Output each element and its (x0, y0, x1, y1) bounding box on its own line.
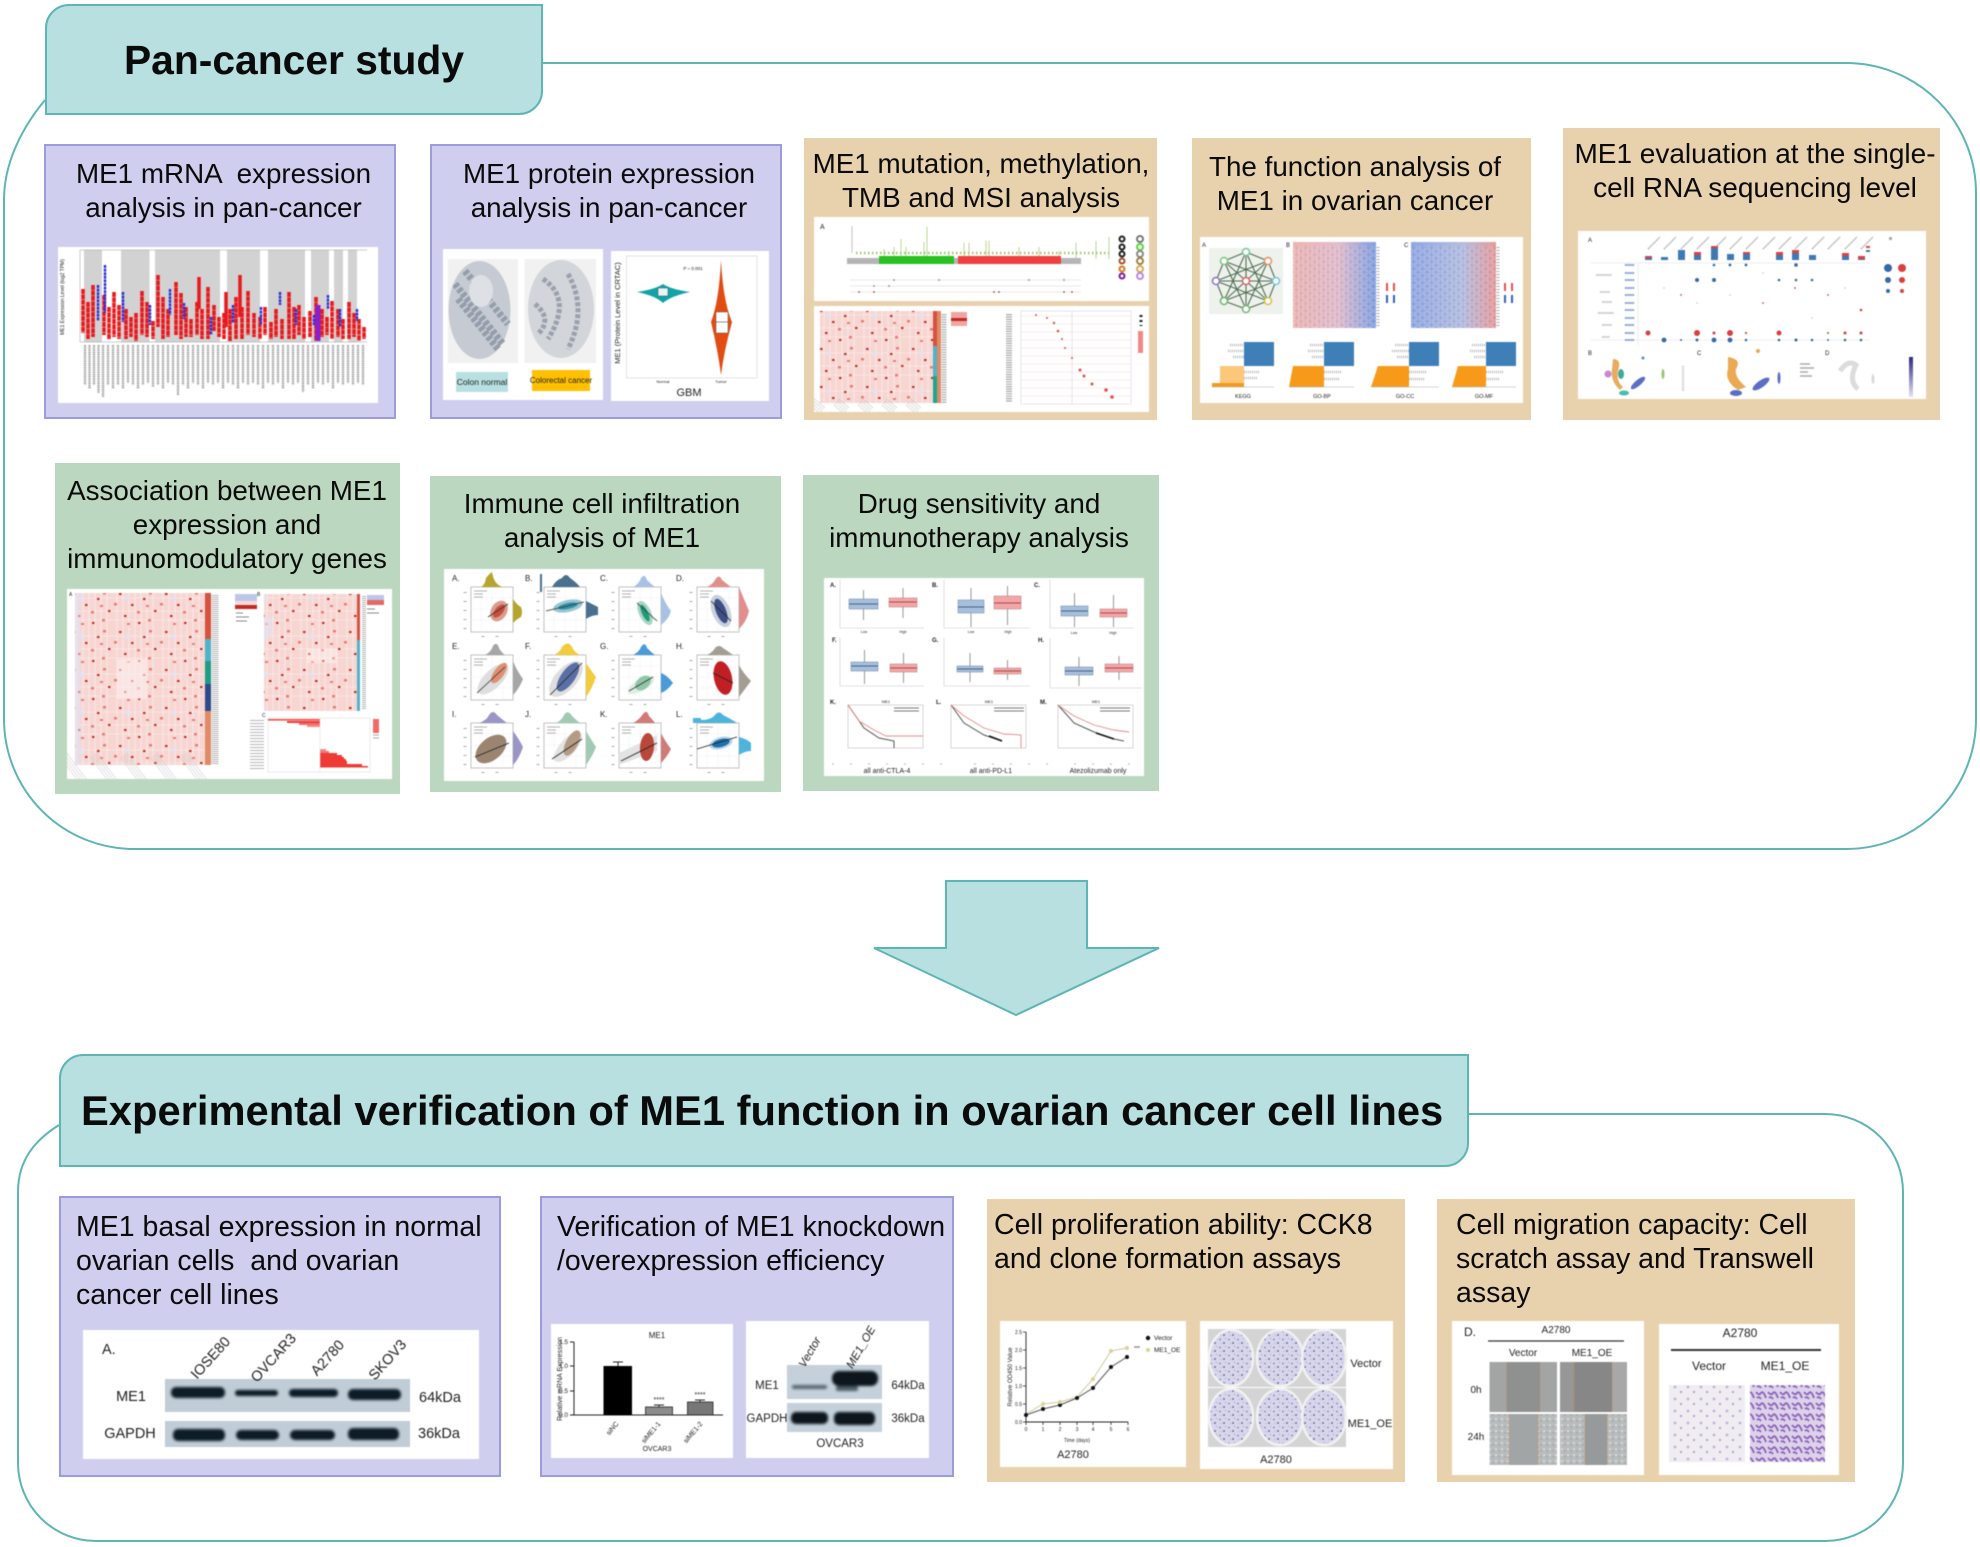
figure: western blot ME1 overexpression: OVCAR3 (816, 1438, 864, 1450)
panel heading (813, 148, 1149, 213)
panel heading: ME1 evaluation at the single- (1574, 138, 1936, 169)
figure: network, heatmaps and enrichment bars: A (1202, 243, 1206, 249)
figure: box plots and survival curves: Low (968, 630, 975, 634)
section heading: Experimental verification: Experimental verification of ME1 function in ovarian cancer cell lines (81, 1087, 1443, 1134)
figure: transwell assay: ME1_OE (1761, 1359, 1809, 1373)
chart: violin plot GBM: Tumor (715, 379, 727, 384)
chart: CCK8 growth curve: 2 (1059, 1427, 1062, 1433)
figure: box plots and survival curves: K. (830, 700, 836, 706)
figure: box plots and survival curves: all anti-CTLA-4 (864, 768, 910, 775)
figure: scratch assay: ME1_OE (1572, 1348, 1613, 1359)
chart: relative mRNA expression: 0.5 (559, 1388, 568, 1395)
figure: network, heatmaps and enrichment bars: GO-CC (1396, 394, 1414, 400)
chart: CCK8 growth curve: 2.5 (1015, 1330, 1022, 1336)
figure: box plots and survival curves: ME1 (985, 699, 994, 704)
figure: clone formation plates (1200, 1321, 1393, 1469)
figure: scratch assay: D. (1464, 1325, 1476, 1339)
figure: tissue staining: Colorectal cancer (530, 376, 592, 385)
figure: box plots and survival curves: Atezolizumab only (1070, 768, 1127, 775)
panel heading: TMB and MSI analysis (842, 182, 1120, 213)
chart: CCK8 growth curve: 0 (1025, 1427, 1028, 1433)
figure: correlation scatter plots: D. (676, 574, 684, 583)
figure: western blot cell lines (83, 1330, 479, 1459)
figure: box plots and survival curves: High (1109, 631, 1117, 635)
chart: CCK8 growth curve: 2.0 (1015, 1348, 1022, 1354)
panel heading (829, 488, 1129, 553)
figure: correlation scatter plots: E. (452, 642, 460, 651)
chart: lollipop mutation map (814, 217, 1149, 301)
section heading: Experimental verification (59, 1054, 1469, 1167)
figure: transwell assay (1659, 1324, 1839, 1475)
figure: box plots and survival curves: F. (832, 638, 837, 644)
figure: scratch assay: A2780 (1542, 1325, 1571, 1336)
figure: dot matrix and UMAP: B (1588, 351, 1592, 357)
figure: dot matrix and UMAP: C (1697, 351, 1702, 357)
figure: scratch assay: Vector (1509, 1348, 1538, 1359)
figure: scratch assay: 24h (1468, 1432, 1484, 1443)
figure: box plots and survival curves: L. (936, 700, 942, 706)
chart: violin plot GBM (611, 251, 769, 401)
chart: CCK8 growth curve: 5 (1110, 1427, 1113, 1433)
figure: correlation scatter plots: G. (600, 642, 608, 651)
panel heading: analysis of ME1 (504, 522, 700, 553)
figure: transwell assay: A2780 (1723, 1326, 1758, 1340)
chart: violin plot GBM: P = 0.001 (683, 266, 703, 271)
panel heading: Drug sensitivity and (858, 488, 1100, 519)
chart: pan-cancer expression box plot: ME1 Expression Level (log2 TPM) (60, 259, 66, 335)
section heading: Pan-cancer study (45, 4, 543, 115)
figure: box plots and survival curves: B. (932, 583, 938, 589)
chart: CCK8 growth curve: 6 (1127, 1427, 1130, 1433)
chart: pan-cancer expression box plot (58, 247, 378, 403)
figure: western blot cell lines: 64kDa (419, 1390, 462, 1406)
figure: box plots and survival curves: M. (1040, 700, 1047, 706)
panel heading: scratch assay and Transwell (1456, 1243, 1814, 1275)
figure: western blot cell lines: ME1 (116, 1389, 146, 1405)
figure: heatmaps and bar chart: C (262, 713, 266, 719)
panel heading: ME1 protein expression (463, 158, 755, 189)
figure: western blot cell lines: IOSE80 (188, 1334, 234, 1383)
figure: box plots and survival curves: Low (861, 630, 868, 634)
chart: violin plot GBM: Normal (657, 379, 670, 384)
panel heading: Verification of ME1 knockdown (557, 1211, 945, 1243)
figure: western blot ME1 overexpression (746, 1321, 929, 1458)
chart: methylation heatmap and lollipop (814, 306, 1149, 412)
figure: network, heatmaps and enrichment bars: KEGG (1235, 394, 1251, 400)
panel heading: analysis in pan-cancer (85, 192, 362, 223)
panel: basal expression (59, 1196, 501, 1477)
figure: clone formation plates: A2780 (1260, 1454, 1292, 1466)
chart: relative mRNA expression: siME1-2 (683, 1421, 705, 1445)
panel heading: Cell proliferation ability: CCK8 (994, 1209, 1373, 1241)
figure: box plots and survival curves: H. (1038, 638, 1044, 644)
chart: CCK8 growth curve: Vector (1154, 1335, 1173, 1342)
figure: western blot ME1 overexpression: ME1_OE (845, 1324, 878, 1371)
panel: ME1 protein expression (430, 144, 782, 419)
figure: network, heatmaps and enrichment bars: B (1286, 243, 1290, 249)
figure: western blot ME1 overexpression: 36kDa (891, 1413, 925, 1425)
figure: clone formation plates: ME1_OE (1348, 1418, 1392, 1430)
panel: drug sensitivity (803, 475, 1159, 791)
panel: knockdown overexpression (540, 1196, 954, 1477)
chart: relative mRNA expression: ME1 (649, 1331, 666, 1340)
figure: correlation scatter plots: F. (525, 642, 531, 651)
figure: network, heatmaps and enrichment bars (1200, 237, 1523, 403)
panel heading (557, 1211, 945, 1277)
panel heading (464, 488, 740, 553)
figure: box plots and survival curves (824, 578, 1144, 776)
chart: CCK8 growth curve: 1 (1042, 1427, 1045, 1433)
figure: box plots and survival curves: ME1 (882, 699, 891, 704)
chart: CCK8 growth curve: *** (1134, 1346, 1140, 1352)
figure: correlation scatter plots: C. (600, 574, 608, 583)
panel heading (76, 1211, 482, 1311)
chart: CCK8 growth curve: 3 (1076, 1427, 1079, 1433)
figure: network, heatmaps and enrichment bars: C (1404, 243, 1409, 249)
panel heading: immunotherapy analysis (829, 522, 1129, 553)
panel heading: The function analysis of (1209, 151, 1501, 182)
figure: correlation scatter plots (444, 569, 764, 781)
figure: correlation scatter plots: A. (452, 574, 460, 583)
section frame: pan-cancer study (3, 62, 1977, 850)
panel: mutation and methylation (804, 138, 1157, 420)
figure: box plots and survival curves: High (1004, 630, 1012, 634)
panel heading: expression and (133, 509, 321, 540)
panel heading (994, 1209, 1373, 1275)
figure: dot matrix and UMAP (1578, 231, 1926, 399)
figure: box plots and survival curves: A. (830, 583, 836, 589)
figure: network, heatmaps and enrichment bars: GO-BP (1313, 394, 1331, 400)
panel heading: Cell migration capacity: Cell (1456, 1209, 1808, 1241)
figure: correlation scatter plots: B. (525, 574, 533, 583)
chart: violin plot GBM: ME1 (Protein Level in CRTAC) (613, 262, 622, 364)
figure: western blot cell lines: A. (102, 1342, 116, 1358)
chart: relative mRNA expression: siNC (605, 1421, 621, 1437)
figure: scratch assay: 0h (1470, 1385, 1482, 1396)
figure: western blot cell lines: A2780 (308, 1337, 348, 1379)
figure: box plots and survival curves: High (899, 630, 907, 634)
chart: CCK8 growth curve (1000, 1321, 1186, 1467)
figure: tissue staining: Colon normal (457, 377, 507, 387)
chart: relative mRNA expression: **** (695, 1392, 706, 1399)
panel: immunomodulatory genes (55, 463, 400, 794)
panel heading: cancer cell lines (76, 1279, 279, 1311)
chart: CCK8 growth curve: 0.0 (1015, 1420, 1022, 1426)
chart: relative mRNA expression: 1.5 (559, 1339, 568, 1346)
figure: box plots and survival curves: all anti-PD-L1 (970, 768, 1012, 775)
chart: relative mRNA expression: siME1-1 (641, 1421, 663, 1445)
chart: relative mRNA expression: OVCAR3 (643, 1446, 671, 1453)
chart: relative mRNA expression: 1.0 (559, 1363, 568, 1370)
figure: western blot ME1 overexpression: ME1 (755, 1380, 779, 1392)
figure: heatmaps and bar chart: A (69, 592, 73, 598)
figure: western blot ME1 overexpression: GAPDH (747, 1413, 787, 1425)
chart: CCK8 growth curve: 4 (1092, 1427, 1095, 1433)
panel heading (1456, 1209, 1814, 1309)
figure: clone formation plates: Vector (1350, 1358, 1382, 1370)
panel heading: ME1 basal expression in normal (76, 1211, 482, 1243)
panel: migration (1437, 1199, 1855, 1482)
figure: network, heatmaps and enrichment bars: GO-MF (1475, 394, 1494, 400)
figure: box plots and survival curves: C. (1034, 583, 1040, 589)
figure: heatmaps and bar chart (67, 589, 392, 779)
figure: scratch assay (1452, 1321, 1644, 1475)
chart: relative mRNA expression: **** (654, 1397, 665, 1404)
panel heading: Immune cell infiltration (464, 488, 740, 519)
figure: correlation scatter plots: J. (525, 710, 531, 719)
chart: CCK8 growth curve: A2780 (1057, 1449, 1089, 1461)
panel: ME1 mRNA expression (44, 144, 396, 419)
panel heading (67, 475, 387, 574)
figure: box plots and survival curves: Low (1071, 631, 1078, 635)
panel heading: ovarian cells and ovarian (76, 1245, 399, 1277)
chart: relative mRNA expression (551, 1324, 733, 1458)
figure: tissue staining (443, 249, 603, 400)
panel: function analysis (1192, 138, 1531, 420)
figure: transwell assay: Vector (1692, 1359, 1726, 1373)
panel heading (1574, 138, 1936, 203)
figure: box plots and survival curves: ME1 (1092, 699, 1101, 704)
figure: dot matrix and UMAP: A (1588, 238, 1592, 244)
panel: proliferation (987, 1199, 1405, 1482)
chart: CCK8 growth curve: Relative OD450 Value (1008, 1347, 1014, 1406)
panel heading: immunomodulatory genes (67, 543, 387, 574)
chart: relative mRNA expression: 0.0 (559, 1412, 568, 1419)
chart: CCK8 growth curve: ME1_OE (1154, 1347, 1181, 1354)
panel heading (76, 158, 371, 223)
chart: relative mRNA expression: Relative mRNA Expression (557, 1337, 564, 1421)
panel heading: ME1 mRNA expression (76, 158, 371, 189)
panel heading: assay (1456, 1277, 1530, 1309)
panel heading: ME1 mutation, methylation, (813, 148, 1149, 179)
chart: violin plot GBM: GBM (676, 387, 702, 399)
chart: CCK8 growth curve: 0.5 (1015, 1402, 1022, 1408)
panel heading: analysis in pan-cancer (471, 192, 747, 223)
figure: correlation scatter plots: I. (452, 710, 456, 719)
figure: correlation scatter plots: K. (600, 710, 608, 719)
chart: CCK8 growth curve: 1.0 (1015, 1384, 1022, 1390)
panel: single-cell evaluation (1563, 128, 1940, 420)
figure: western blot cell lines: 36kDa (418, 1426, 461, 1442)
section heading: Pan-cancer study: Pan-cancer study (124, 37, 464, 83)
figure: western blot ME1 overexpression: 64kDa (891, 1380, 925, 1392)
figure: western blot cell lines: GAPDH (104, 1426, 156, 1442)
panel heading: and clone formation assays (994, 1243, 1341, 1275)
chart: CCK8 growth curve: Time (days) (1064, 1438, 1090, 1444)
panel: immune infiltration (430, 476, 781, 792)
panel heading: cell RNA sequencing level (1593, 172, 1917, 203)
chart: lollipop mutation map: A (820, 224, 825, 231)
figure: correlation scatter plots: H. (676, 642, 684, 651)
section frame: experimental verification (17, 1113, 1904, 1542)
panel heading: ME1 in ovarian cancer (1217, 185, 1493, 216)
figure: box plots and survival curves: G. (932, 638, 939, 644)
figure: heatmaps and bar chart: B (257, 592, 261, 598)
figure: western blot cell lines: OVCAR3 (248, 1331, 300, 1386)
chart: CCK8 growth curve: 1.5 (1015, 1366, 1022, 1372)
figure: western blot ME1 overexpression: Vector (797, 1334, 824, 1370)
arrow: pan-cancer to experimental verification (874, 880, 1160, 1016)
panel heading (463, 158, 755, 223)
figure: dot matrix and UMAP: D (1825, 351, 1830, 357)
figure: western blot cell lines: SKOV3 (366, 1337, 410, 1384)
panel heading: Association between ME1 (67, 475, 387, 506)
panel heading (1209, 151, 1501, 216)
figure: correlation scatter plots: L. (676, 710, 683, 719)
panel heading: /overexpression efficiency (557, 1245, 884, 1277)
